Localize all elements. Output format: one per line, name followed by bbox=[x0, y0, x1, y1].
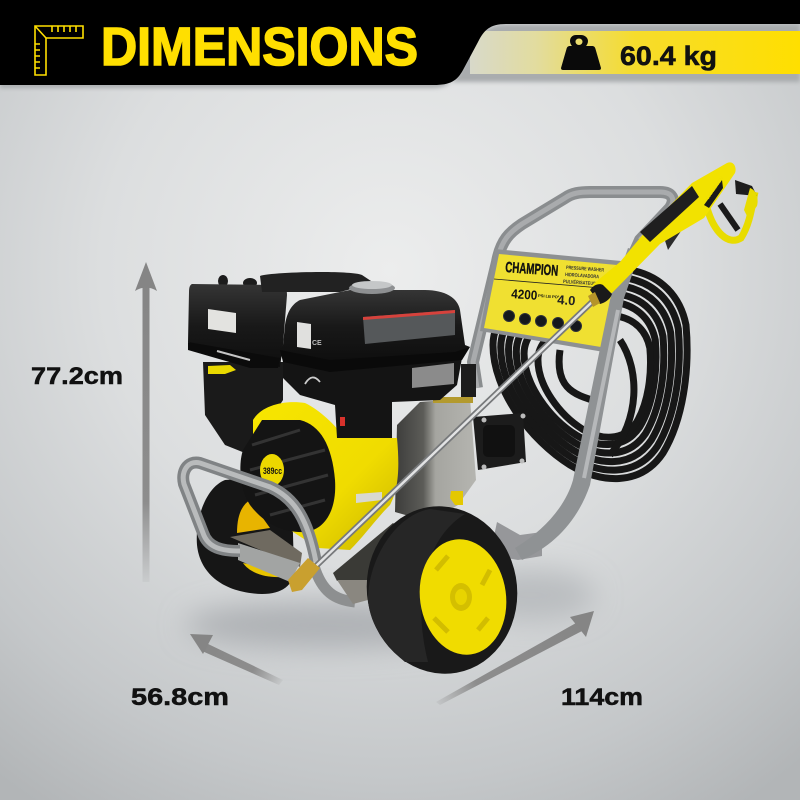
rear handguard ribs bbox=[660, 207, 690, 250]
front bumper frame bbox=[183, 463, 355, 602]
trigger bbox=[720, 204, 738, 230]
brass fittings bbox=[433, 397, 473, 403]
warning label bbox=[363, 310, 455, 344]
pressure valve bbox=[461, 364, 476, 397]
header band bbox=[0, 0, 800, 88]
engine throttle arc bbox=[305, 377, 320, 384]
wand brass bbox=[588, 292, 600, 307]
floor shadow bbox=[185, 569, 595, 649]
spray gun bbox=[588, 162, 758, 307]
brass nozzle bbox=[288, 558, 320, 592]
engine lower body bbox=[203, 362, 283, 455]
side warning label bbox=[412, 363, 454, 388]
fuel tank bbox=[280, 281, 470, 372]
arrow: height bbox=[135, 262, 157, 582]
wand collar bbox=[590, 284, 612, 304]
wand bbox=[316, 302, 592, 566]
arrow: width bbox=[436, 611, 594, 705]
rear frame tube bbox=[473, 192, 673, 388]
air filter box bbox=[188, 275, 287, 368]
yellow engine housing bbox=[253, 402, 398, 550]
left wheel bbox=[197, 478, 294, 594]
control panel: HIDROLAVADORA bbox=[565, 272, 599, 280]
arrow: depth bbox=[190, 634, 283, 685]
gearcase bbox=[395, 398, 476, 522]
grip bbox=[735, 180, 757, 196]
wheel hub bbox=[412, 534, 514, 660]
displacement value: 389cc bbox=[263, 466, 282, 476]
fuel cap bbox=[349, 281, 395, 294]
gun barrel bbox=[592, 162, 736, 293]
psi unit: PSI LB PO² bbox=[538, 293, 560, 300]
barrel collar bbox=[640, 186, 699, 242]
psi rating: 4200 bbox=[511, 286, 538, 303]
title: DIMENSIONS bbox=[101, 17, 418, 77]
axle plate bbox=[337, 580, 368, 604]
choke lever bbox=[208, 365, 236, 374]
icon: carpenter square ruler bbox=[35, 26, 83, 75]
fuel valve bbox=[450, 491, 463, 505]
hose coil bbox=[493, 267, 687, 479]
qr decal bbox=[297, 322, 311, 349]
CE mark: CE bbox=[312, 340, 322, 347]
trigger guard bbox=[707, 192, 755, 240]
front upright tube bbox=[515, 248, 640, 560]
height label: 77.2cm bbox=[31, 363, 123, 390]
base plate bbox=[230, 530, 302, 582]
pump block bbox=[473, 413, 526, 470]
knobs bbox=[504, 310, 582, 332]
icon: weight bbox=[561, 35, 601, 70]
recoil starter cover bbox=[240, 420, 335, 532]
gpm rating: 4.0 bbox=[557, 292, 576, 308]
engine lower housing bbox=[283, 358, 462, 438]
air filter decal bbox=[208, 309, 236, 333]
depth label: 56.8cm bbox=[131, 684, 229, 711]
panel caption: PRESSURE WASHER bbox=[566, 265, 604, 274]
rear frame base bbox=[490, 522, 542, 560]
control panel bbox=[480, 249, 621, 352]
weight strip bbox=[470, 31, 800, 74]
pressure washer bbox=[183, 162, 758, 686]
right wheel bbox=[354, 494, 530, 686]
brand logo: CHAMPION bbox=[505, 259, 559, 280]
control panel: PULVÉRISATEUR bbox=[563, 277, 597, 287]
gun brand patch: CHAMPION bbox=[705, 175, 725, 201]
displacement badge bbox=[260, 454, 284, 486]
cooling shroud bbox=[260, 272, 374, 292]
engine mount bracket bbox=[333, 523, 402, 581]
product sticker bbox=[356, 492, 382, 503]
red engine switch bbox=[340, 417, 345, 426]
weight value: 60.4 kg bbox=[620, 41, 717, 71]
width label: 114cm bbox=[561, 684, 643, 711]
lever bbox=[217, 351, 250, 360]
